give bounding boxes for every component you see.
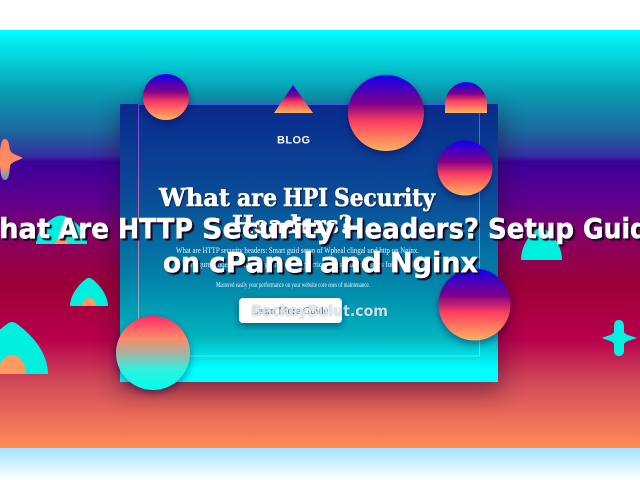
body text: Configure guides that harden your site with practical rules and clear steps for cPanel. [183, 260, 415, 269]
main headline [0, 212, 640, 279]
serif card title: What [158, 183, 230, 212]
icon: lower left cyan circle [116, 316, 190, 390]
icon: lower right gradient circle [438, 268, 510, 340]
icon: large gradient circle [348, 75, 424, 151]
icon: cyan arch upper left [36, 216, 87, 244]
panel: blog card [120, 104, 498, 382]
main headline: on [163, 246, 200, 279]
body text: Mastered easily your performance on your website core ones of maintenance. [216, 281, 370, 289]
icon: gradient half dome [445, 82, 487, 113]
serif card title [158, 183, 436, 239]
button: Learn More Guide [252, 306, 329, 317]
icon: cyan arch right [521, 228, 562, 260]
watermark url: BeckeyBulut.com [251, 302, 388, 320]
body text [176, 246, 419, 289]
main headline: Security [202, 212, 335, 245]
button [239, 298, 342, 323]
serif card title: HPI [283, 183, 328, 212]
serif card title: are [237, 183, 277, 212]
main headline: Headers? [343, 212, 479, 245]
serif card title: Security [334, 183, 436, 212]
icon: orange sparkle [0, 139, 23, 180]
bottom fade band [0, 448, 640, 480]
icon: cyan arch lower left [0, 322, 48, 374]
icon: gradient triangle [274, 85, 313, 113]
serif card title: Headers? [232, 210, 352, 239]
eyebrow label: BLOG [277, 134, 310, 146]
icon: medium gradient circle [438, 140, 492, 196]
main headline: Are [58, 212, 109, 245]
main headline: Nginx [390, 246, 478, 279]
body text: What are HTTP security headers: Smart guid setup of Wpheal clingal und http on Nginx. [176, 246, 419, 255]
main headline: and [320, 246, 382, 279]
main headline: cPanel [209, 246, 313, 279]
panel shadow [118, 110, 502, 392]
icon: cyan arch middle left [70, 278, 108, 306]
main headline: Setup [488, 212, 574, 245]
icon: cyan cross sparkle [602, 320, 637, 356]
main headline: HTTP [118, 212, 193, 245]
icon: small gradient circle [143, 74, 189, 120]
